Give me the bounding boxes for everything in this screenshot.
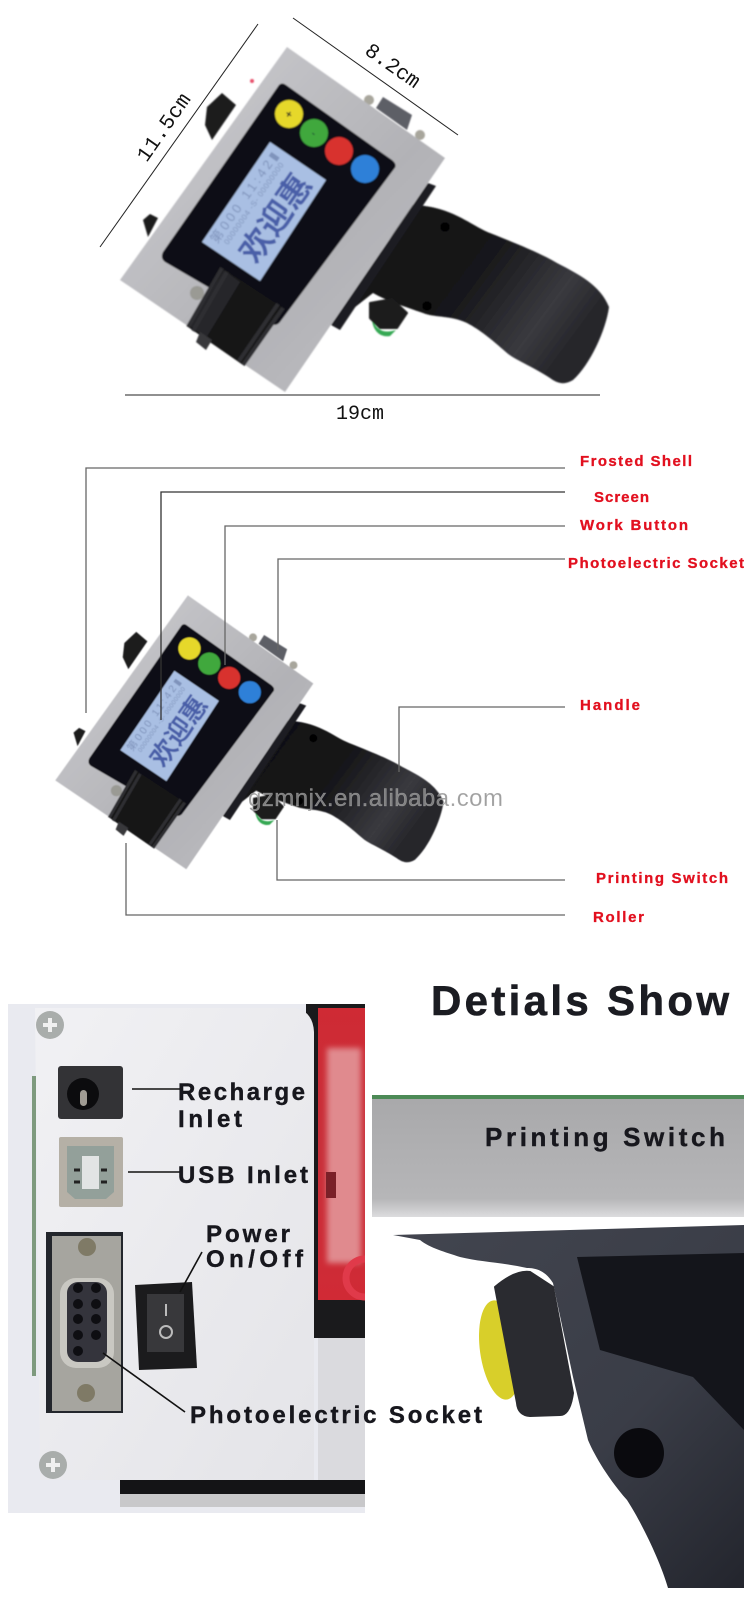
green board edge (32, 1076, 36, 1376)
handle (345, 205, 609, 383)
red indicator dot (250, 79, 254, 83)
part labels (568, 453, 744, 926)
heading: Detials Show (431, 977, 729, 1024)
callout labels: Recharge (178, 1079, 305, 1106)
panel: printing switch close-up (372, 1095, 744, 1588)
buttons (275, 100, 379, 183)
watermark: gzmnjx.en.alibaba.com (248, 785, 503, 812)
leader lines (86, 468, 565, 915)
printer device (middle): 第000 11:42▮ (124, 676, 184, 754)
power switch (135, 1282, 197, 1370)
LCD screen: 00000004 -S- 00000000 (222, 160, 286, 246)
dimension: 8.2cm: 8.2cm (360, 40, 424, 95)
recharge jack (58, 1066, 123, 1119)
part labels: Roller (593, 909, 644, 926)
printer device (top) (120, 47, 609, 392)
dark inset (577, 1253, 744, 1430)
black edge strip (331, 183, 436, 330)
silver strip (372, 1095, 744, 1217)
green edge (372, 1095, 744, 1099)
part labels: Work Button (580, 517, 688, 534)
panel: ports photo (8, 1004, 384, 1513)
panel: dimensioned printer photo (100, 18, 609, 426)
dimension: 8.2cm (293, 18, 458, 135)
switch button body (495, 1272, 573, 1416)
dimension: 19cm: 19cm (336, 403, 384, 426)
label: Printing Switch (485, 1122, 725, 1152)
grip (393, 1225, 744, 1588)
icon: side switch (143, 214, 158, 237)
part labels: Screen (594, 489, 649, 506)
roller (188, 268, 283, 365)
callout labels: On/Off (206, 1246, 304, 1273)
silver body (120, 47, 445, 392)
callout lines (103, 1089, 202, 1412)
callout labels: USB Inlet (178, 1162, 308, 1189)
LCD screen: 欢迎惠 (232, 167, 319, 270)
buttons: - (308, 128, 319, 140)
part labels: Handle (580, 697, 640, 714)
buttons: + (282, 108, 295, 122)
backdrop (8, 1004, 365, 1513)
screw bottom (39, 1451, 67, 1479)
bottom dark strip (120, 1480, 365, 1494)
printing switch button (370, 299, 407, 336)
callout labels: Power (206, 1221, 290, 1248)
USB socket (59, 1137, 123, 1207)
icon: rear trigger (205, 93, 236, 140)
handle screw holes (422, 222, 450, 311)
panel: parts diagram (55, 453, 744, 926)
callout labels: Photoelectric Socket (190, 1402, 482, 1429)
screw top (36, 1011, 64, 1039)
part labels: Printing Switch (596, 870, 728, 887)
callout labels: Inlet (178, 1106, 242, 1133)
aluminium plate (306, 1013, 314, 1338)
part labels: Frosted Shell (580, 453, 692, 470)
icon: rear connector (364, 95, 425, 140)
dimension: 11.5cm: 11.5cm (134, 90, 197, 167)
yellow button cap (473, 1298, 527, 1402)
black control panel (162, 84, 396, 325)
red cartridge area (306, 1004, 365, 1480)
part labels: Photoelectric Socket (568, 555, 744, 572)
printer device (middle) (55, 595, 444, 869)
LCD screen (202, 142, 326, 281)
printer device (middle): 00000004 -S- 00000000 (137, 686, 187, 754)
DB9 socket (46, 1232, 123, 1413)
callout labels (178, 1079, 482, 1429)
LCD screen: 第000 11:42▮ (207, 149, 281, 246)
printer device (middle): 欢迎惠 (144, 691, 214, 772)
screw hole (614, 1428, 664, 1478)
dimension: 11.5cm (100, 24, 258, 247)
